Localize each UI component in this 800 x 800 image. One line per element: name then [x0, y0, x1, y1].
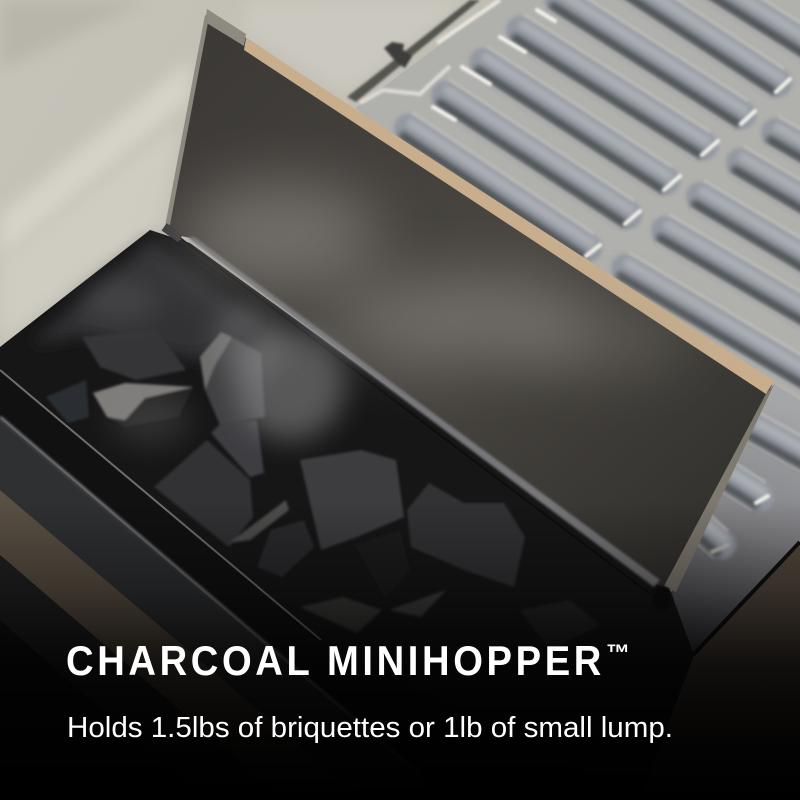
- hinge rim: [188, 237, 660, 587]
- lid tan edge: [244, 38, 774, 394]
- grate lower section: [650, 385, 800, 655]
- hopper box: [0, 230, 694, 800]
- charcoal lumps: [46, 330, 600, 650]
- title: CHARCOAL MINIHOPPER: [66, 637, 605, 684]
- lid hinge tab: [205, 9, 246, 46]
- bottom dark gradient: [0, 500, 800, 800]
- slot highlights: [433, 10, 790, 552]
- subtitle: Holds 1.5lbs of briquettes or 1lb of small lump.: [67, 712, 673, 744]
- grate slots: [408, 0, 800, 545]
- title: ™: [606, 640, 630, 667]
- grill grate: [347, 0, 800, 655]
- dim haze in hopper: [30, 240, 260, 360]
- smoke: [80, 180, 690, 445]
- lower right frame: [620, 542, 800, 800]
- open lid: [162, 9, 775, 610]
